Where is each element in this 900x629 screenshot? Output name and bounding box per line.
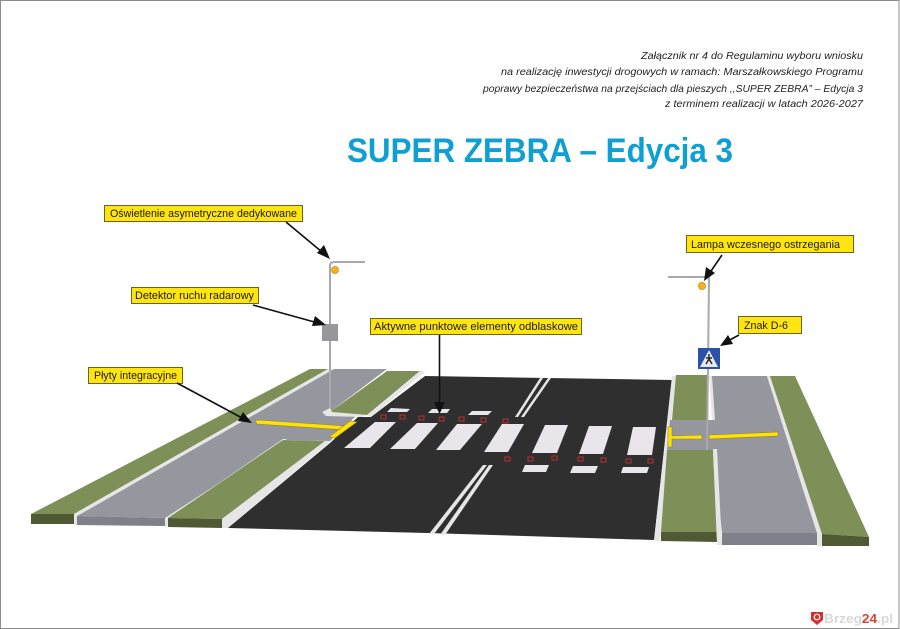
callout: integration plates: Płyty integracyjne <box>94 370 177 382</box>
callout: warning lamp: Lampa wczesnego ostrzegania <box>691 239 841 251</box>
icon: D-6 pedestrian crossing sign <box>698 348 720 369</box>
callout: integration plates <box>88 368 252 423</box>
asphalt roadway <box>228 376 672 540</box>
left sidewalk section <box>31 369 425 528</box>
zebra crossing stripes <box>344 408 656 473</box>
tactile integration plates, right <box>668 427 778 447</box>
header note: na realizację inwestycji drogowych w ramach: Marszałkowskiego Programu <box>501 66 863 78</box>
centre line lower <box>429 465 493 535</box>
callout: D-6 sign: Znak D-6 <box>744 320 788 332</box>
active reflective road studs <box>381 415 653 463</box>
centre line upper <box>515 378 551 417</box>
callout: D-6 sign <box>720 316 802 346</box>
header note: poprawy bezpieczeństwa na przejściach dla pieszych ,,SUPER ZEBRA” – Edycja 3 <box>482 83 863 95</box>
title: SUPER ZEBRA – Edycja 3 <box>347 132 733 170</box>
callout: reflective elements: Aktywne punktowe elementy odblaskowe <box>374 321 578 333</box>
callout: asymmetric lighting <box>104 206 330 259</box>
callout: asymmetric lighting: Oświetlenie asymetryczne dedykowane <box>110 208 297 220</box>
right sidewalk section <box>654 375 869 546</box>
radar detector box <box>322 324 338 341</box>
header note <box>482 50 864 110</box>
header note: z terminem realizacji w latach 2026-2027 <box>664 98 864 110</box>
callout: warning lamp <box>686 236 854 281</box>
callout: reflective elements <box>370 318 582 414</box>
icon: red shield <box>811 612 823 625</box>
icon: amber warning lamp left <box>332 266 338 274</box>
callout: radar detector: Detektor ruchu radarowy <box>135 290 254 302</box>
right light pole with lamp and sign <box>668 277 720 450</box>
road illustration <box>31 369 869 546</box>
left light pole with lamp and radar <box>322 262 365 408</box>
header note: Załącznik nr 4 do Regulaminu wyboru wniosku <box>640 50 863 62</box>
watermark logo: Brzeg24.pl <box>824 611 893 626</box>
icon: amber warning lamp right <box>698 282 706 290</box>
callout: radar detector <box>132 288 326 326</box>
tactile integration plates, left <box>255 420 357 438</box>
